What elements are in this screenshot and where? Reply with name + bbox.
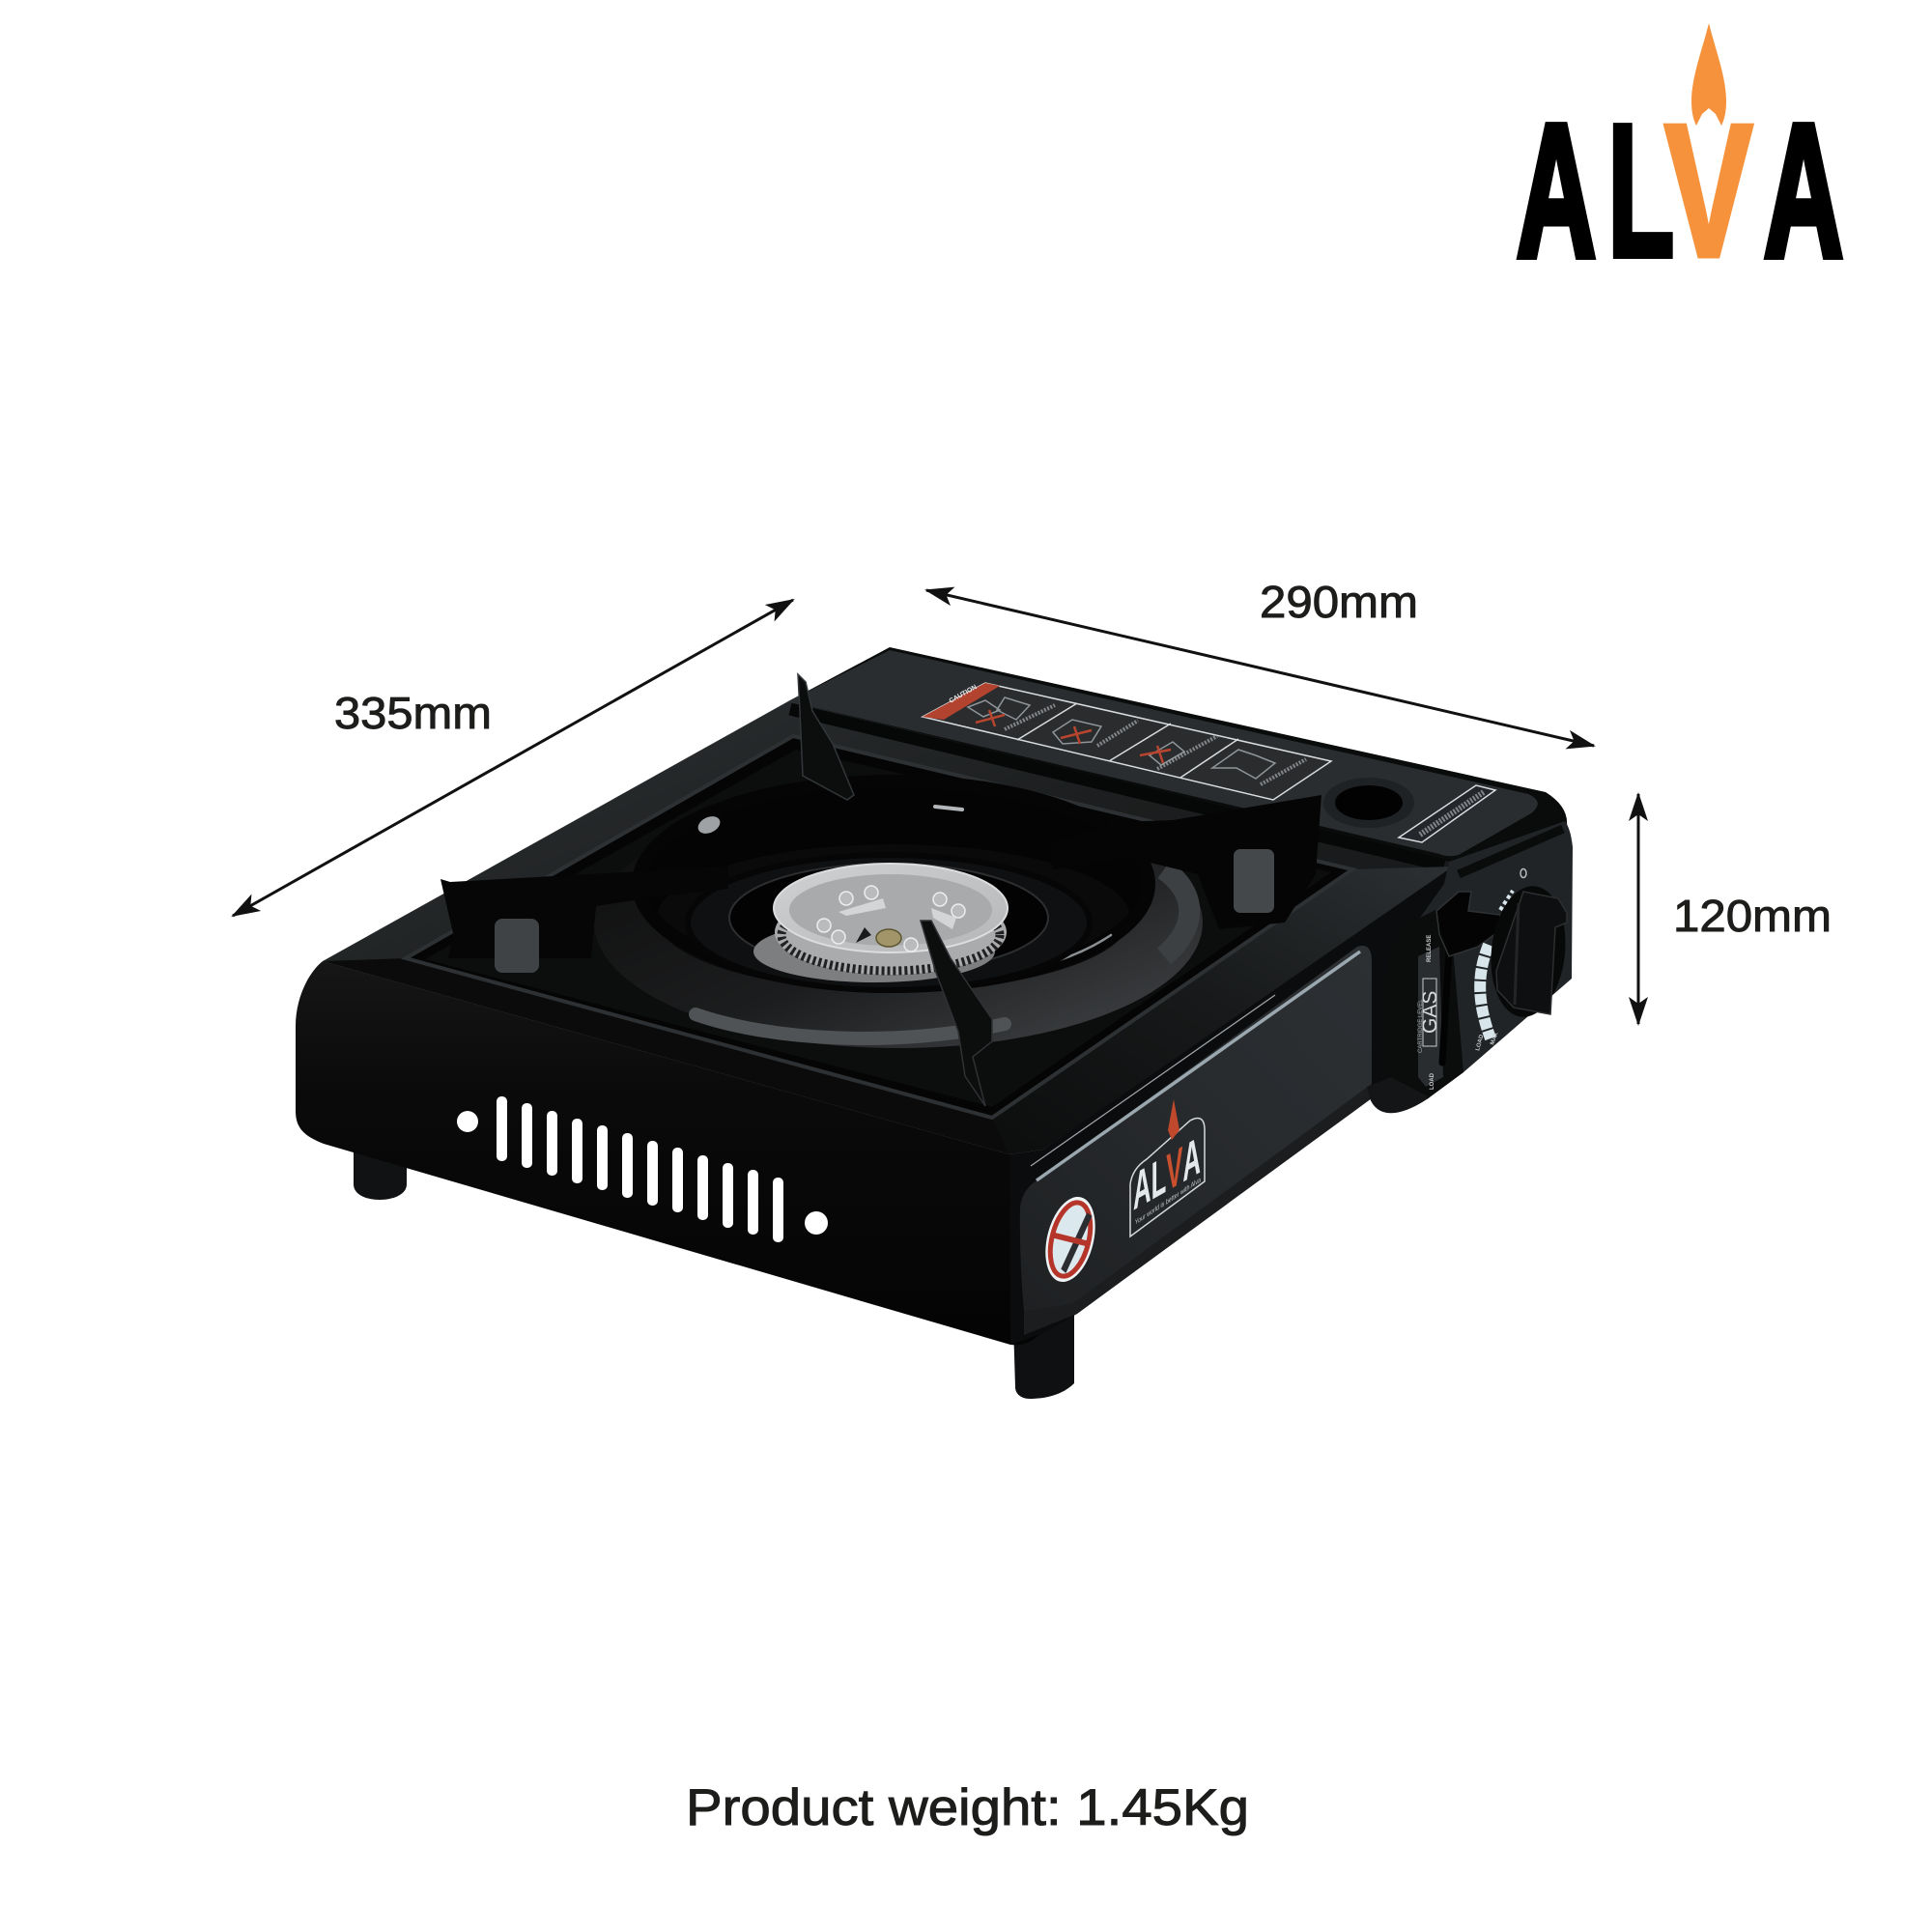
dial scale — [1480, 945, 1491, 1038]
control panel — [1367, 821, 1573, 1113]
knob — [1496, 892, 1567, 1014]
pan ring — [639, 781, 1149, 986]
recess outer ring — [688, 855, 1090, 990]
lever — [1436, 892, 1500, 956]
warning label — [1399, 785, 1495, 842]
ring reflections — [804, 935, 1111, 986]
control panel: MAX — [1490, 1032, 1499, 1046]
power indicator — [1520, 869, 1526, 877]
gas gauge plate: RELEASE — [1427, 935, 1433, 962]
vent hole: right — [805, 1211, 828, 1235]
dimension: depth 335mm — [233, 600, 793, 916]
product: portable gas stove — [296, 647, 1573, 1399]
left support window — [495, 919, 539, 973]
side panel upper reflection — [1031, 995, 1275, 1166]
burner studs — [817, 886, 965, 952]
burner bracket — [838, 898, 886, 916]
right ledge — [992, 867, 1453, 1154]
dimension: width 290mm — [926, 577, 1594, 746]
burner — [753, 864, 1008, 982]
top ledge around tray — [323, 701, 1453, 1154]
pan support: front — [921, 921, 992, 1106]
inner floor — [657, 844, 1130, 991]
label: 120mm: 120mm — [1673, 891, 1832, 941]
burner center gap — [856, 927, 871, 943]
warning fine print — [1420, 792, 1484, 835]
pan support: back — [798, 674, 854, 800]
vent hole: left — [457, 1111, 478, 1132]
label: 335mm: 335mm — [334, 688, 492, 738]
label pictograms — [968, 697, 1275, 779]
knob ridge — [1515, 903, 1519, 1005]
vent panel — [457, 1096, 828, 1242]
foot: left — [354, 1150, 407, 1200]
caution red tab — [923, 683, 1000, 720]
stove side logo: ALVA — [1133, 1125, 1201, 1222]
panel foot bump — [1367, 1077, 1430, 1113]
igniter screw — [876, 929, 901, 947]
right support window — [1234, 849, 1274, 913]
panel plate — [1388, 821, 1573, 1100]
left unit housing — [1386, 903, 1463, 1099]
arrow: height — [1636, 794, 1640, 1024]
logo wordmark — [1517, 85, 1843, 297]
panel top lip — [1459, 829, 1563, 874]
caution label: CAUTION — [949, 684, 979, 705]
burner cap disc — [774, 864, 1008, 952]
gas gauge plate: GAS — [1419, 991, 1441, 1034]
label fine print — [1005, 705, 1306, 784]
rear control panel lid — [788, 650, 1538, 856]
vent slots — [497, 1096, 783, 1242]
gas gauge plate: CARTRIDGE LEVEL — [1418, 999, 1424, 1053]
side panel highlight — [1037, 952, 1360, 1180]
rear rim — [788, 647, 1567, 869]
gas gauge plate — [1418, 935, 1443, 1090]
product weight caption: Product weight: 1.45Kg — [686, 1779, 1249, 1836]
label dividers — [1017, 703, 1238, 778]
ring highlight spots — [696, 813, 723, 837]
burner gear ring — [775, 890, 1007, 975]
dial dots — [1500, 891, 1513, 910]
bowl bottom reflection — [696, 1014, 1005, 1038]
bowl inner shadow — [635, 782, 1152, 991]
logo: ALVA — [1517, 23, 1843, 297]
pan support: right — [1048, 795, 1321, 929]
burner bowl — [594, 797, 1203, 1048]
stove side logo — [1130, 1099, 1205, 1236]
dial labels: LOAD — [1475, 1034, 1486, 1052]
knob recess — [1485, 882, 1572, 1021]
stove side logo: Your world is better with Alva — [1135, 1176, 1201, 1227]
no smoking icon — [1037, 1192, 1103, 1287]
label: 290mm: 290mm — [1260, 577, 1418, 627]
foot: right — [1013, 1304, 1074, 1399]
recessed tray — [406, 736, 1352, 1118]
logo wordmark: V — [1664, 85, 1753, 297]
recess inner ring — [729, 864, 1048, 972]
caution label — [923, 683, 1331, 800]
icon: flame — [1691, 23, 1726, 126]
gas gauge plate: LOAD — [1430, 1072, 1435, 1090]
pan support: left — [440, 867, 728, 973]
stove right side panel — [1020, 946, 1372, 1312]
lid groove — [790, 709, 1444, 866]
front ledge — [323, 958, 1009, 1154]
logo wordmark: A — [1764, 85, 1843, 297]
stove front face — [296, 961, 1053, 1345]
bowl right reflection — [1164, 869, 1189, 956]
cartridge hole — [1323, 778, 1414, 828]
logo wordmark: L — [1607, 85, 1674, 297]
fuel slot — [1442, 952, 1449, 1063]
side lower band — [1024, 1084, 1372, 1335]
right side base — [1009, 860, 1478, 1345]
burner base — [753, 921, 995, 982]
arrow: width — [926, 590, 1594, 746]
arrow: depth — [233, 600, 793, 916]
logo wordmark: A — [1517, 85, 1596, 297]
